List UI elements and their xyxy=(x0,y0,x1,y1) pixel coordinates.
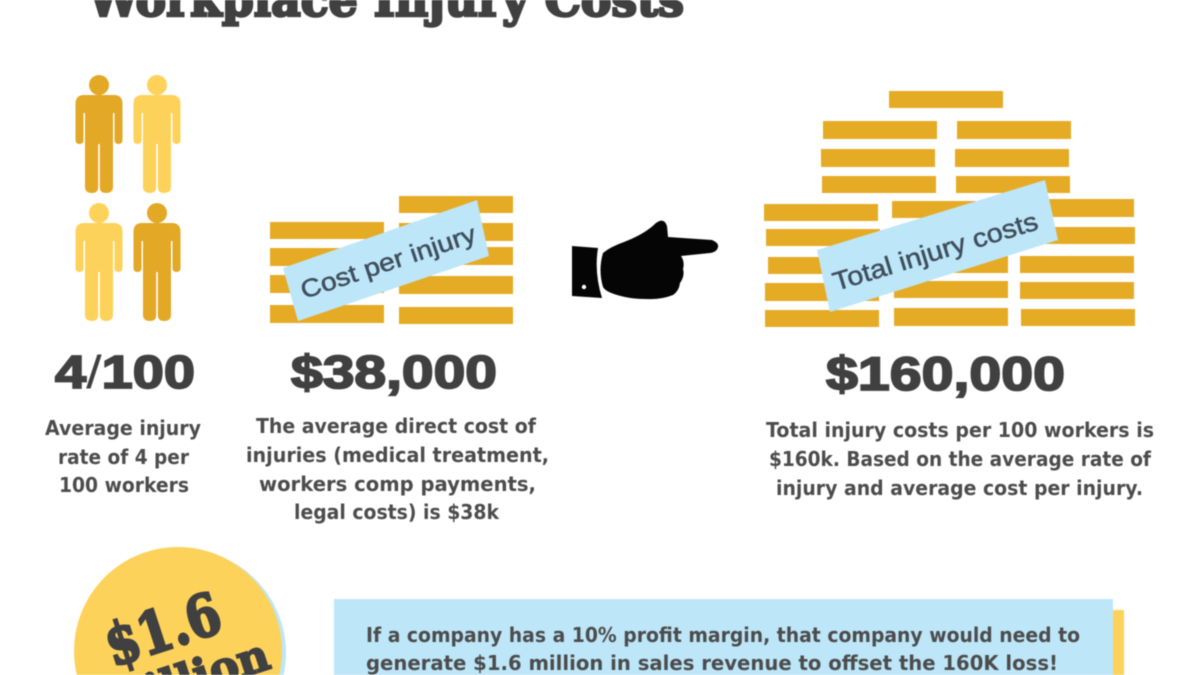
label: total injury costs: Total injury costs xyxy=(829,206,1041,297)
text: injury rate description: rate of 4 per xyxy=(58,445,189,469)
icon: light person xyxy=(76,203,122,321)
icon: dark person xyxy=(76,75,122,193)
icon: total injury costs money stack xyxy=(764,91,1135,327)
label: total injury costs xyxy=(817,180,1058,312)
text: cost per injury description: The average direct cost of xyxy=(256,414,536,438)
text: injury rate description xyxy=(45,416,201,497)
text: cost per injury description: legal costs) is $38k xyxy=(294,500,500,524)
callout: profit margin: generate $1.6 million in sales revenue to offset the 160K loss! xyxy=(366,651,1058,675)
icon: cost per injury money stack xyxy=(270,196,513,324)
stat: $38,000: $38,000 xyxy=(291,346,497,398)
text: cost per injury description: injuries (medical treatment, xyxy=(246,443,549,467)
money bars xyxy=(270,196,513,324)
callout: profit margin: If a company has a 10% profit margin, that company would need to xyxy=(366,623,1080,647)
icon: four people, injury rate xyxy=(76,75,180,321)
text: injury rate description: Average injury xyxy=(45,416,201,440)
icon: pointing hand xyxy=(572,221,718,299)
text: injury rate description: 100 workers xyxy=(59,473,189,497)
label: cost per injury: Cost per injury xyxy=(297,220,480,305)
icon: dark person xyxy=(134,203,180,321)
icon: light person xyxy=(134,75,180,193)
money bars xyxy=(764,91,1135,327)
text: cost per injury description: workers comp payments, xyxy=(259,472,536,496)
text: total injury costs description: injury and average cost per injury. xyxy=(776,476,1143,500)
callout: profit margin xyxy=(334,599,1124,675)
stat: 4/100: 4/100 xyxy=(55,346,195,398)
text: total injury costs description: Total injury costs per 100 workers is xyxy=(766,418,1154,442)
text: total injury costs description: $160k. Based on the average rate of xyxy=(769,447,1151,471)
label: cost per injury xyxy=(283,200,489,321)
badge: $1.6 million xyxy=(74,547,286,675)
text: cost per injury description xyxy=(246,414,549,524)
stat: $160,000: $160,000 xyxy=(826,347,1065,400)
text: total injury costs description xyxy=(766,418,1154,500)
